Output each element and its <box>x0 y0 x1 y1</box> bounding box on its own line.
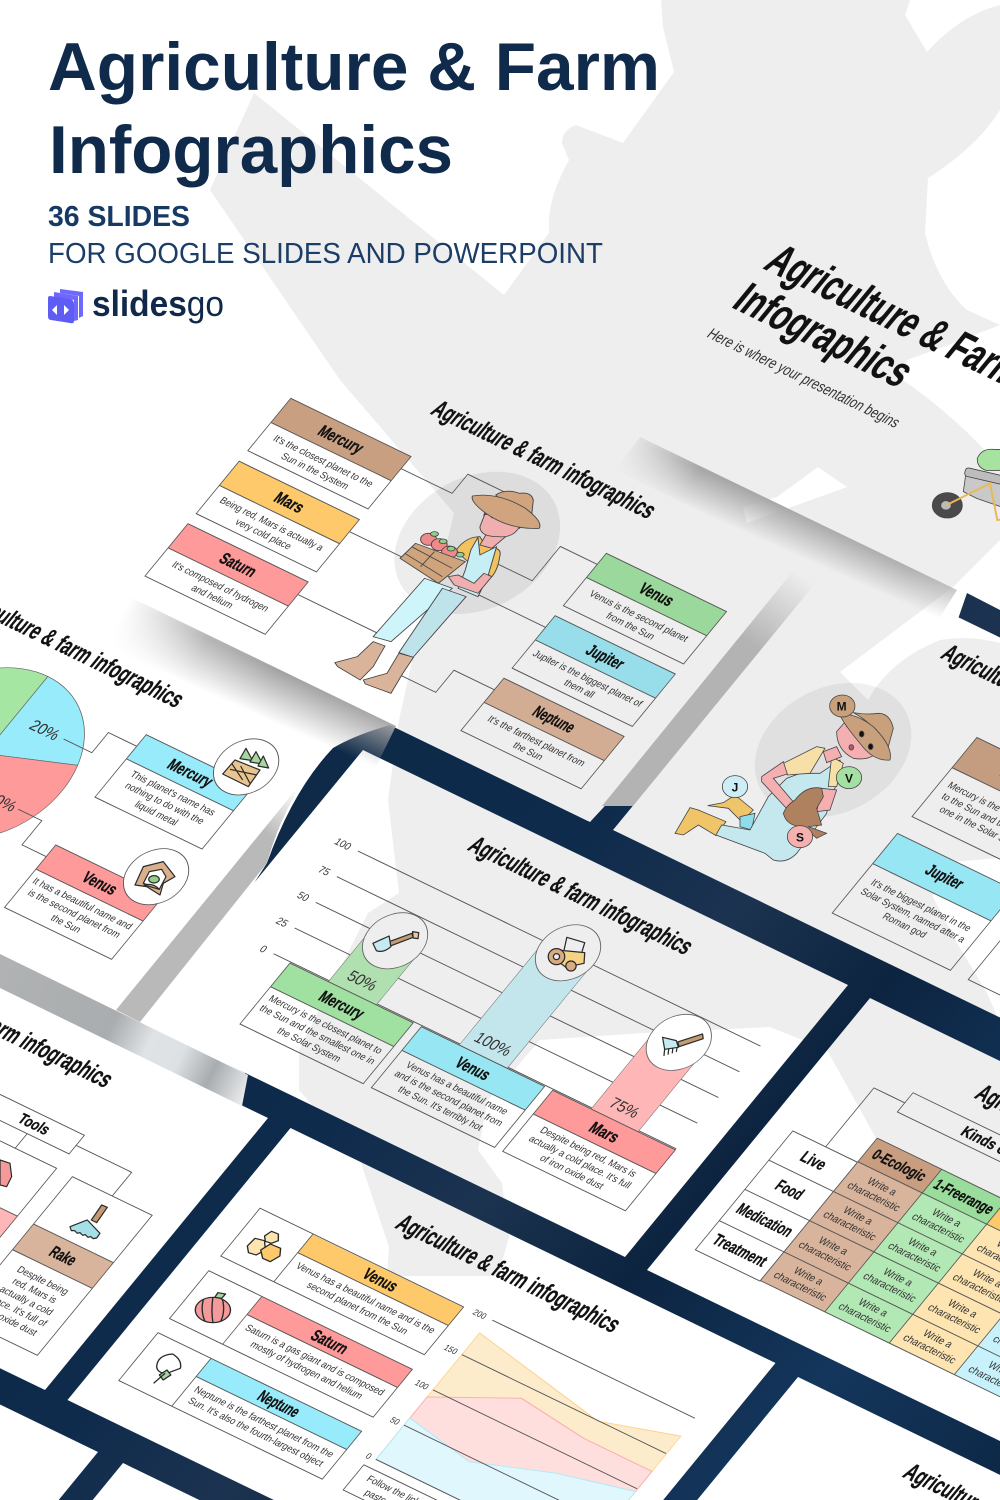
card: Mercury: Mercury <box>315 988 369 1023</box>
card: second column <box>968 900 1000 1037</box>
grid lines <box>376 1319 695 1500</box>
column: 1-Freerange: Write a <box>929 1207 964 1230</box>
shadow under farmer slide <box>133 602 396 764</box>
area series: red <box>376 1365 658 1500</box>
card: Mars: Mars <box>585 1119 623 1147</box>
card: rake <box>0 1177 152 1355</box>
pie chart <box>0 639 125 868</box>
axis labels: 50 <box>388 1415 403 1427</box>
card: Venus: It has a beautiful name and <box>30 876 135 932</box>
card: Venus <box>221 1208 464 1355</box>
icon: wheelbarrow <box>932 449 1000 520</box>
card: Venus: Venus <box>451 1054 494 1084</box>
axis labels: 100 <box>331 837 353 853</box>
gutter shadow right of farmer slide <box>602 549 836 806</box>
card: Neptune: the Sun <box>510 740 545 763</box>
icons: tractor and rake tool <box>0 1160 107 1239</box>
card: Venus: Venus is the second planet <box>586 589 691 645</box>
card: Venus: the Sun. It's terribly hot <box>395 1084 485 1134</box>
card: rake: red, Mars is <box>9 1276 59 1306</box>
card: Jupiter: Jupiter <box>582 642 629 673</box>
main title line two: Infographics <box>49 112 453 188</box>
card: Jupiter <box>512 616 675 726</box>
row labels <box>695 1131 857 1281</box>
card: Mercury: It's the closest planet to the <box>270 433 375 490</box>
column: 1-Freerange <box>825 1169 1000 1343</box>
slide count: 36 SLIDES <box>48 201 190 233</box>
column: 2-Intensive: characteristic <box>900 1333 958 1366</box>
logo icon <box>48 289 83 323</box>
card: Venus: Venus has a beautiful name <box>403 1060 510 1117</box>
card: Jupiter: Roman god <box>880 911 929 941</box>
header block <box>48 29 660 324</box>
column: 0-Ecologic: characteristic <box>771 1270 829 1304</box>
card: Saturn: Saturn <box>215 550 261 581</box>
axis labels: 25 <box>273 916 290 930</box>
card: rake: Rake <box>45 1243 81 1269</box>
shadow under cover slide <box>631 437 957 614</box>
illustration: kneeling farmer with chicken: V <box>845 771 853 785</box>
column: 0-Ecologic: characteristic <box>820 1210 878 1243</box>
slidesgo logo <box>48 283 224 324</box>
column: 1-Freerange: Write a <box>880 1267 915 1289</box>
card: Mars <box>196 461 359 572</box>
bar: Mars 75% <box>591 1031 702 1132</box>
logo wordmark: slidesgo <box>92 283 224 324</box>
card: Mercury: the Solar System <box>274 1026 343 1065</box>
card: Mercury: liquid metal <box>132 800 180 828</box>
card: Jupiter: Solar System, named after a <box>858 887 968 945</box>
axis labels <box>356 1307 489 1461</box>
column: 0-Ecologic: Write a <box>815 1236 850 1258</box>
slide title: Agriculture & farm infographics <box>390 1210 626 1338</box>
backdrop circle <box>361 448 594 638</box>
column: 2-Intensive: characteristic <box>925 1303 983 1336</box>
icon circle: greenhouse <box>110 839 202 914</box>
card: Venus: the Sun <box>48 913 83 936</box>
axis labels: 50 <box>294 890 311 904</box>
card: Jupiter: Jupiter is the biggest planet of <box>530 649 645 710</box>
card: Venus: from the Sun <box>603 611 657 642</box>
card: Mars <box>503 1090 675 1211</box>
row labels: Food <box>771 1177 808 1204</box>
card: Venus: second planet from the Sun <box>304 1280 410 1337</box>
card: Neptune <box>119 1333 362 1479</box>
card: Mars: actually a cold place. It's full <box>526 1134 633 1191</box>
icons: crate with trees and greenhouse <box>135 748 269 895</box>
bar: Mars 75%: 75% <box>605 1095 643 1122</box>
card: Mars: Mars <box>270 489 308 517</box>
bar: Venus 100%: 100% <box>470 1030 515 1060</box>
card: Mercury: This planet's name has <box>127 769 218 818</box>
card: Mercury <box>248 398 411 509</box>
cover title line two: Infographics <box>723 274 924 396</box>
navy backdrop between slides <box>0 593 1000 1500</box>
column: 0-Ecologic: 0-Ecologic <box>868 1147 930 1185</box>
illustration: kneeling farmer with chicken <box>675 695 893 861</box>
card: Mars: Despite being red, Mars is <box>537 1125 639 1180</box>
area chart <box>356 1307 699 1500</box>
column: 1-Freerange: Write a <box>905 1237 940 1259</box>
icon circle: trees <box>200 729 292 804</box>
card: rake: Despite being <box>14 1265 71 1298</box>
note box <box>343 1465 576 1500</box>
table <box>695 1107 1000 1407</box>
card: Jupiter: Jupiter <box>921 861 968 893</box>
icon circle: rake <box>633 1005 725 1080</box>
card: Jupiter: them all <box>561 678 597 701</box>
bar: Venus 100% <box>459 941 592 1068</box>
tools box: Tools <box>14 1111 54 1139</box>
card: Saturn: mostly of hydrogen and helium <box>247 1339 365 1402</box>
column: 1-Freerange: characteristic <box>885 1241 943 1275</box>
card: Saturn <box>145 524 308 634</box>
slide: pie chart <box>0 585 300 964</box>
card: Mercury: Sun in the System <box>278 451 351 492</box>
column: 0-Ecologic: Write a <box>791 1266 825 1288</box>
card: Mercury <box>912 737 1000 874</box>
bar: Mercury 50%: 50% <box>343 968 381 995</box>
tools box <box>0 1094 84 1154</box>
illustration: farmer holding crate <box>335 491 540 693</box>
card: Neptune: Neptune <box>253 1388 304 1421</box>
card: Venus: Venus <box>358 1265 402 1295</box>
icon circle: shovel <box>349 903 441 978</box>
axis labels: 200 <box>471 1307 489 1321</box>
card: Mars: Being red, Mars is actually a <box>217 495 326 554</box>
card: Venus: and is the second planet from <box>392 1069 505 1129</box>
slide: kneeling farmer <box>676 600 1000 1037</box>
axis labels <box>247 837 353 956</box>
area series: orange <box>376 1333 684 1500</box>
column: 0-Ecologic: Write a <box>864 1176 899 1198</box>
card: Mercury: Mercury <box>314 422 368 458</box>
area series: blue <box>376 1392 636 1500</box>
axis labels: 0 <box>257 944 269 956</box>
column: 2-Intensive: Write a <box>945 1298 980 1320</box>
card: Neptune: Sun. It's also the fourth-largest object <box>185 1396 326 1469</box>
card: Mars: of iron oxide dust <box>537 1153 606 1192</box>
large farmer silhouette <box>210 0 1000 1276</box>
column: 1-Freerange: characteristic <box>835 1301 893 1335</box>
pie labels <box>0 717 74 816</box>
illustration: kneeling farmer with chicken: S <box>796 830 804 844</box>
grid lines <box>274 851 761 1149</box>
column: 0-Ecologic: characteristic <box>795 1240 853 1273</box>
axis labels: 100 <box>413 1378 432 1392</box>
table grid lines <box>760 1138 1000 1406</box>
card: Saturn: and helium <box>188 583 235 611</box>
icon circle: tractor <box>522 915 614 990</box>
row labels: Medication <box>732 1200 797 1241</box>
bar: Mercury 50% <box>328 929 419 1005</box>
column: 0-Ecologic: Write a <box>840 1205 875 1228</box>
connector lines <box>280 449 614 712</box>
main title line one: Agriculture & Farm <box>48 29 660 105</box>
card: Mars: very cold place <box>232 517 294 552</box>
slide title: Agriculture & farm infographics <box>425 396 662 524</box>
slide: tools diagram <box>0 965 228 1355</box>
column: 3-Extensive <box>954 1232 1000 1406</box>
column: 0-Ecologic: characteristic <box>844 1180 902 1214</box>
icons: shovel, tractor and rake <box>373 932 703 1056</box>
card: Jupiter: It's the biggest planet in the <box>868 878 973 934</box>
pie labels: 20% <box>25 717 63 744</box>
row labels: Treatment <box>708 1231 771 1271</box>
slide: farmer with crate <box>144 344 773 789</box>
card: Venus <box>371 1027 545 1147</box>
column: 2-Intensive: Write a <box>920 1328 955 1351</box>
card: Mercury <box>95 735 253 849</box>
card: Venus <box>5 845 163 959</box>
illustration: kneeling farmer with chicken: M <box>837 700 847 714</box>
column: 0-Ecologic <box>760 1138 942 1312</box>
card: Mercury: Mercury is the closest planet to <box>266 994 385 1057</box>
card: Saturn <box>170 1271 412 1417</box>
row labels: Live <box>796 1148 830 1174</box>
gutter shadow under pie slide <box>0 954 248 1106</box>
kinds box <box>897 1093 1000 1239</box>
icons: honeycomb, pumpkin and cotton <box>154 1231 281 1383</box>
slide: cover <box>703 236 1000 460</box>
card: Venus: Venus <box>78 869 121 899</box>
column: 1-Freerange: characteristic <box>909 1212 967 1245</box>
card: Neptune <box>461 678 624 789</box>
column: 2-Intensive <box>889 1200 1000 1375</box>
axis labels: 150 <box>442 1342 460 1356</box>
card: Mercury: Mercury <box>163 756 217 791</box>
connector lines <box>0 719 137 857</box>
card: Neptune: It's the farthest planet from <box>485 714 587 769</box>
backdrop circle <box>723 660 943 840</box>
connector lines <box>0 1077 132 1196</box>
card: Mercury: the Sun and the smallest one in <box>257 1003 377 1067</box>
connector line <box>826 1088 905 1162</box>
card: Venus <box>563 553 727 664</box>
axis labels: 75 <box>315 865 332 879</box>
card: Jupiter <box>832 833 1000 970</box>
card: Mercury: nothing to do with the <box>122 781 206 827</box>
card: Mercury <box>240 963 413 1084</box>
card: tractor <box>0 1130 57 1309</box>
card: Neptune: Neptune <box>528 703 579 737</box>
axis labels: 0 <box>364 1451 375 1461</box>
slide: livestock table <box>695 1027 1000 1409</box>
card: Neptune: Neptune is the farthest planet from the <box>191 1385 336 1460</box>
silhouette highlight notch <box>743 467 847 523</box>
illustration: kneeling farmer with chicken: J <box>732 780 738 794</box>
compatibility line: FOR GOOGLE SLIDES AND POWERPOINT <box>48 238 603 270</box>
card: Venus: Venus <box>634 580 678 610</box>
card: Venus: is the second planet from <box>25 888 123 941</box>
column: 1-Freerange: Write a <box>855 1297 890 1319</box>
cover subtitle: Here is where your presentation begins <box>703 326 904 432</box>
slide: bar chart <box>201 784 807 1211</box>
card: Saturn: Saturn <box>307 1327 352 1358</box>
column: 1-Freerange: characteristic <box>860 1271 918 1305</box>
card: Saturn: It's composed of hydrogen <box>169 560 271 614</box>
card: Venus: Venus has a beautiful name and is the <box>293 1261 437 1336</box>
card: Saturn: Saturn is a gas giant and is composed <box>242 1323 387 1398</box>
slide: area chart <box>118 1158 738 1500</box>
gutter shadow right of pie slide <box>116 781 303 1022</box>
slide title: Agriculture & farm infographics <box>462 832 699 960</box>
